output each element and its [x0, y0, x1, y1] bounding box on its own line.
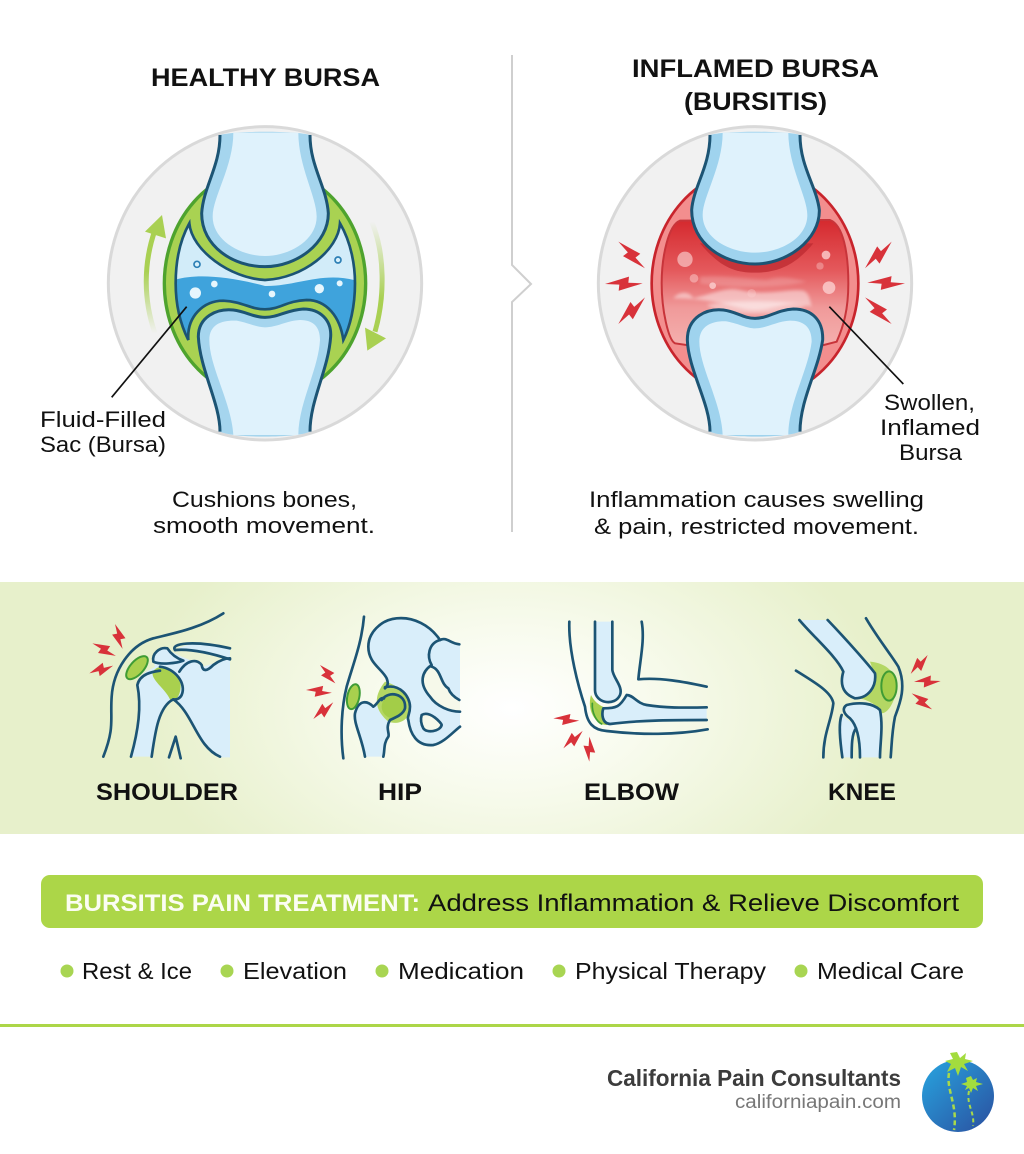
caption: healthy: Cushions bones, [172, 487, 357, 512]
caption: healthy [153, 487, 375, 538]
banner: treatment: BURSITIS PAIN TREATMENT: [65, 890, 420, 917]
label: knee: KNEE [828, 779, 896, 806]
icon: shoulder [88, 613, 230, 758]
icon: knee [796, 618, 941, 757]
list: treatments: Medical Care [817, 958, 964, 984]
swollen capsule [652, 168, 858, 398]
label: fluid-filled sac [40, 407, 166, 457]
upper bone [202, 132, 328, 267]
icon: logo with palm trees [922, 1052, 994, 1132]
footer: brand name and url: California Pain Consultants [607, 1065, 901, 1091]
label: fluid-filled sac: Fluid-Filled [40, 407, 166, 432]
label: elbow: ELBOW [584, 779, 679, 806]
label: swollen, inflamed bursa: Swollen, [884, 390, 975, 415]
title: inflamed bursa: (BURSITIS) [684, 88, 827, 116]
arrow: downward movement [365, 222, 386, 351]
footer: brand name and url [607, 1065, 901, 1113]
list: treatments [60, 958, 964, 984]
banner: treatment: Address Inflammation & Relieve Discomfort [428, 890, 959, 917]
caption: inflamed [589, 487, 924, 539]
lower bone [687, 309, 823, 437]
pain bolts right [860, 237, 905, 329]
label: swollen, inflamed bursa: Inflamed [880, 415, 980, 440]
label: swollen, inflamed bursa: Bursa [899, 440, 963, 465]
icon: hip [305, 617, 460, 758]
title: inflamed bursa [632, 55, 879, 116]
label: fluid-filled sac: Sac (Bursa) [40, 432, 166, 457]
icon: elbow [553, 622, 708, 762]
label: shoulder: SHOULDER [96, 779, 238, 806]
caption: healthy: smooth movement. [153, 513, 375, 538]
leader line [829, 307, 903, 384]
lower bone [198, 309, 331, 437]
fluid sac [170, 217, 360, 350]
panel: affected joints [0, 582, 1024, 834]
caption: inflamed: & pain, restricted movement. [594, 514, 919, 539]
arrow: upward movement [145, 215, 166, 333]
footer: brand name and url: californiapain.com [735, 1092, 901, 1113]
list: treatments: Medication [398, 958, 524, 984]
label: swollen, inflamed bursa [880, 390, 980, 465]
list: treatments: Elevation [243, 958, 347, 984]
banner: treatment [41, 875, 983, 928]
title: healthy bursa: HEALTHY BURSA [151, 64, 380, 92]
upper bone [692, 132, 819, 273]
list: treatments: Rest & Ice [82, 958, 192, 984]
pain bolts left [605, 237, 650, 329]
diagram: healthy joint [108, 127, 422, 440]
leader line [112, 307, 187, 397]
diagram: inflamed joint [598, 127, 912, 440]
caption: inflamed: Inflammation causes swelling [589, 487, 924, 512]
title: inflamed bursa: INFLAMED BURSA [632, 55, 879, 83]
list: treatments: Physical Therapy [575, 958, 767, 984]
label: hip: HIP [378, 779, 422, 806]
inflamed fluid [662, 220, 848, 346]
bursa capsule [164, 168, 366, 398]
